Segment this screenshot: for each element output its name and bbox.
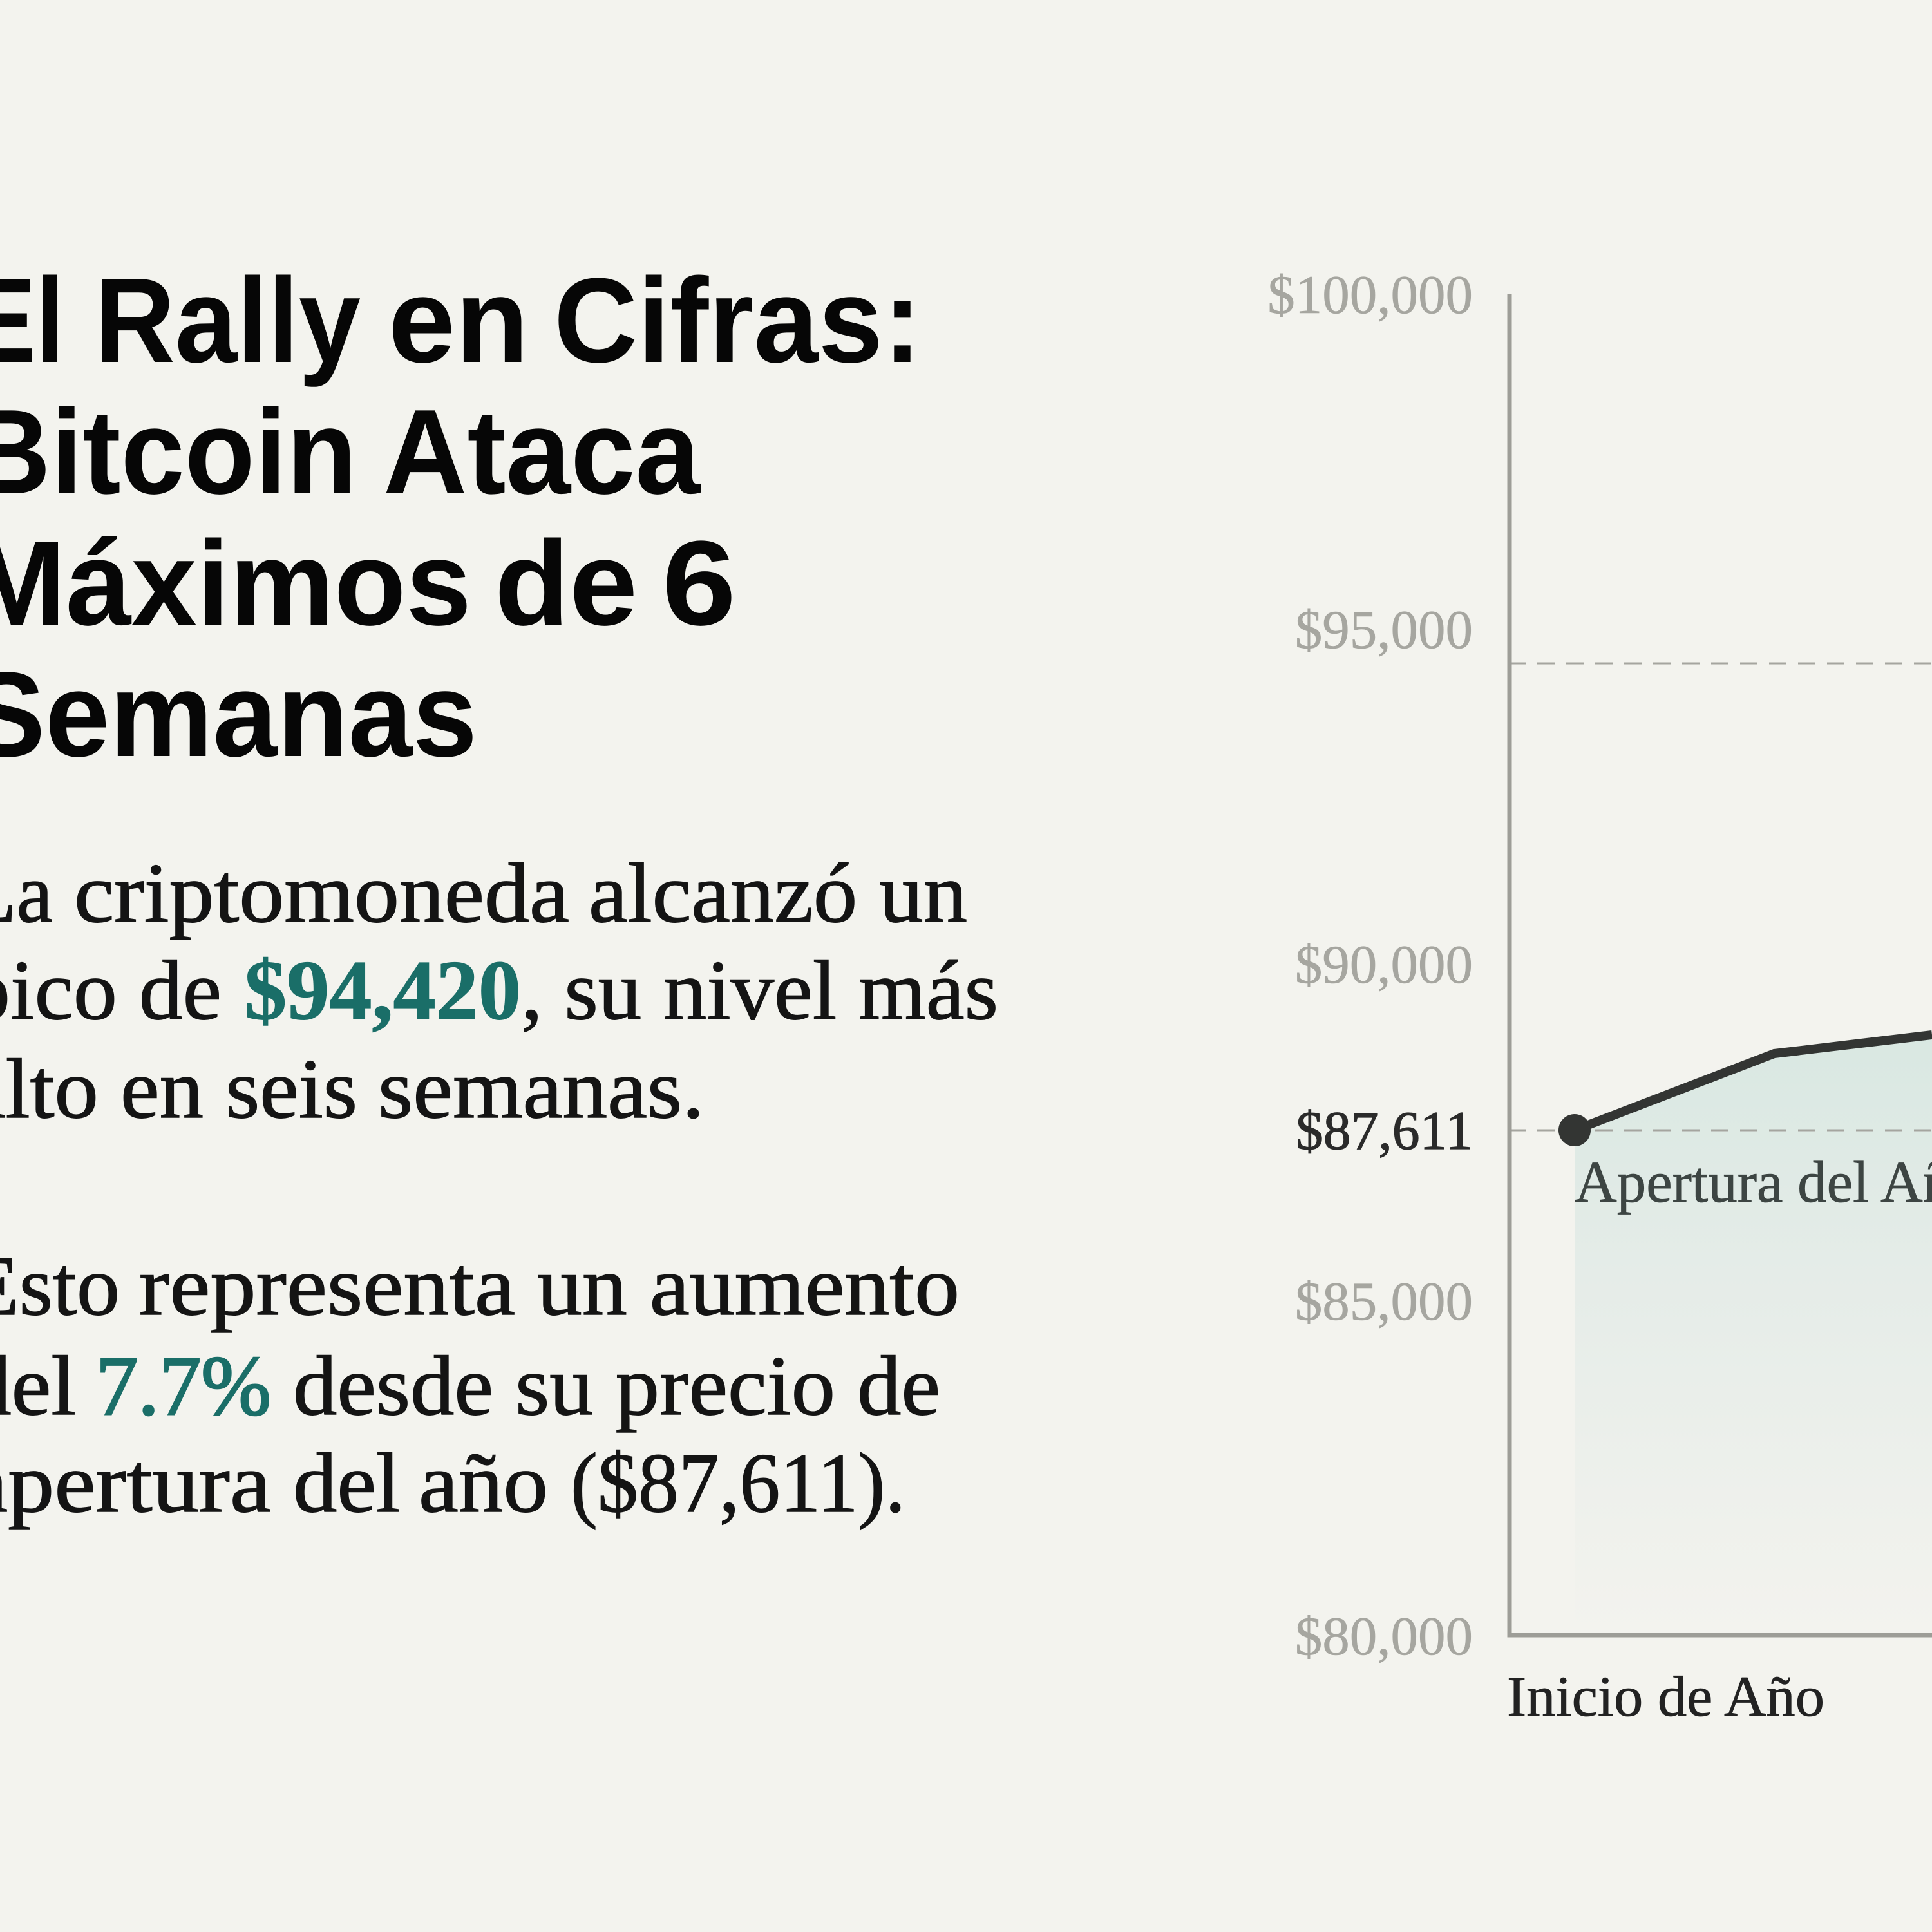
paragraph: peak price: alcanzó un bbox=[589, 846, 967, 940]
title: de bbox=[495, 516, 638, 650]
paragraph: yearly gain: del bbox=[293, 1435, 401, 1530]
y axis labels: $100,000 bbox=[1267, 265, 1473, 325]
title: Rally bbox=[95, 253, 361, 388]
title: Cifras: bbox=[554, 253, 922, 388]
title bbox=[0, 253, 922, 782]
y axis labels: $85,000 bbox=[1295, 1271, 1473, 1332]
y axis labels: $95,000 bbox=[1295, 600, 1473, 660]
line chart bbox=[1267, 265, 1932, 1728]
paragraph: peak price bbox=[0, 846, 998, 1136]
y axis labels: $87,611 bbox=[1296, 1101, 1473, 1161]
price line bbox=[1575, 1035, 1932, 1130]
paragraph: yearly gain: representa bbox=[139, 1238, 515, 1333]
y axis labels: $80,000 bbox=[1295, 1606, 1473, 1667]
area under price line bbox=[1575, 1035, 1932, 1633]
paragraph: yearly gain: 7.7% bbox=[96, 1338, 271, 1433]
title: en bbox=[388, 253, 529, 388]
paragraph: peak price: criptomoneda bbox=[74, 846, 569, 940]
title: 6 bbox=[662, 516, 736, 650]
paragraph: yearly gain: año bbox=[419, 1435, 548, 1530]
paragraph: peak price: semanas. bbox=[378, 1041, 705, 1136]
y axis labels bbox=[1267, 265, 1473, 1667]
paragraph: yearly gain: un aumento bbox=[537, 1238, 960, 1333]
paragraph: peak price: $94,420 bbox=[244, 943, 521, 1037]
paragraph: yearly gain bbox=[0, 1238, 960, 1530]
x axis label: Inicio de Año bbox=[1507, 1665, 1824, 1728]
paragraph: yearly gain: ($87,611). bbox=[571, 1435, 905, 1530]
y axis labels: $90,000 bbox=[1295, 934, 1473, 995]
paragraph: peak price: , su nivel más bbox=[521, 943, 998, 1037]
axes bbox=[1510, 294, 1932, 1635]
title: Ataca bbox=[383, 384, 701, 519]
paragraph: yearly gain: desde su precio de bbox=[293, 1338, 940, 1433]
opening price marker bbox=[1558, 1114, 1591, 1146]
